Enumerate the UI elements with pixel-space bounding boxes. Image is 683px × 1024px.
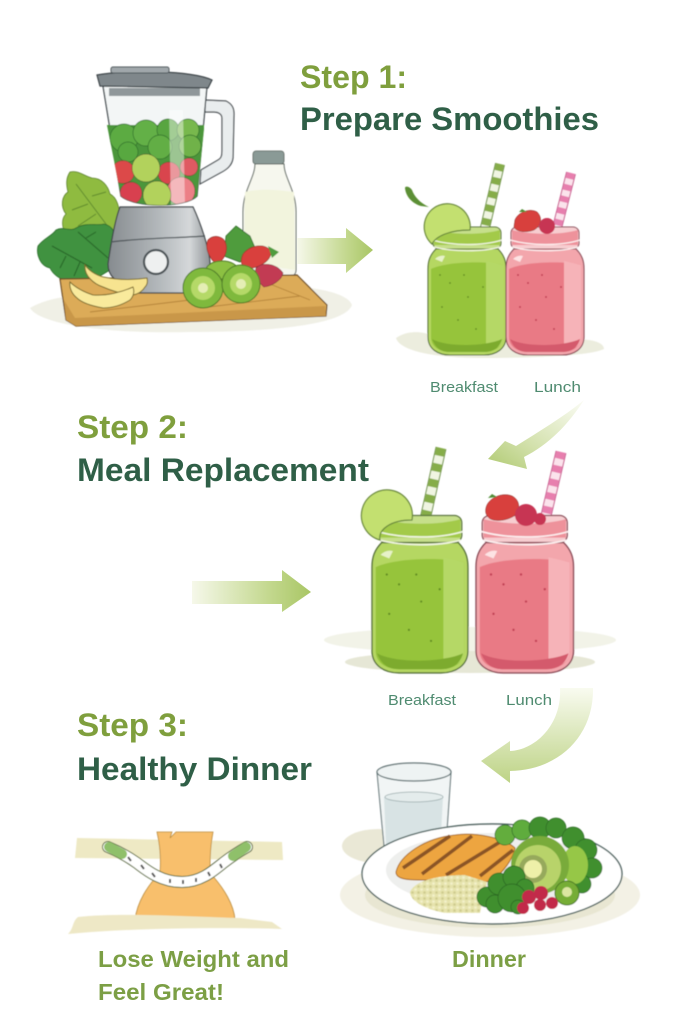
label: lunch small: Lunch	[534, 379, 581, 396]
icon: couscous	[410, 875, 487, 913]
icon: berries	[486, 494, 546, 526]
icon: green smoothie jar	[428, 227, 506, 355]
icon: blender	[97, 67, 234, 293]
icon: milk bottle	[243, 151, 296, 278]
icon: green straw	[484, 164, 500, 232]
icon: leaf stem	[405, 187, 429, 207]
label: breakfast large: Breakfast	[388, 692, 457, 709]
text: lose weight and feel great: Feel Great!	[98, 979, 224, 1005]
icon: green smoothie jar	[372, 515, 468, 673]
icon: strawberries and leaves	[207, 226, 283, 287]
icon: torso	[135, 832, 235, 920]
icon: pink straw	[556, 173, 571, 232]
text: lose weight and feel great	[98, 946, 289, 1005]
icon: measuring tape	[108, 847, 247, 884]
heading: step 3	[77, 707, 312, 787]
text: lose weight and feel great: Lose Weight and	[98, 946, 289, 972]
heading: step 1: Step 1:	[300, 59, 407, 95]
illustration: large smoothie jars	[324, 448, 616, 673]
heading: step 1	[300, 59, 599, 137]
icon: pink straw	[545, 452, 561, 520]
heading: step 2: Meal Replacement	[77, 452, 369, 488]
icon: bananas	[70, 265, 147, 308]
heading: step 3: Healthy Dinner	[77, 751, 312, 787]
arrow: blender to jars	[297, 228, 373, 273]
icon: glass of water	[377, 763, 451, 846]
arrow: toward large jars	[192, 570, 311, 612]
icon: greens	[495, 817, 602, 894]
icon: broccoli	[477, 866, 534, 914]
label: lunch large: Lunch	[506, 692, 552, 709]
heading: step 2	[77, 409, 369, 488]
icon: lime slice	[424, 204, 470, 244]
heading: step 1: Prepare Smoothies	[300, 101, 599, 137]
icon: berries	[514, 209, 555, 234]
icon: kiwi slices	[183, 261, 260, 308]
illustration: dinner plate with water glass	[340, 763, 640, 937]
icon: kiwi slice	[555, 881, 579, 905]
icon: ground strokes	[68, 915, 282, 934]
icon: lime slice	[361, 490, 412, 540]
arrow: curved down to step 2	[488, 400, 584, 469]
illustration: waist with measuring tape	[68, 832, 283, 934]
icon: cutting board	[60, 275, 327, 326]
label: breakfast small: Breakfast	[430, 379, 499, 396]
icon: grilled chicken	[396, 834, 515, 882]
icon: pink smoothie jar	[506, 227, 584, 355]
jar contents	[106, 118, 205, 206]
illustration: small smoothie jars	[396, 164, 604, 358]
icon: raspberries	[517, 886, 558, 914]
heading: step 3: Step 3:	[77, 707, 188, 743]
label: dinner: Dinner	[452, 946, 526, 972]
icon: spinach leaves	[38, 172, 120, 283]
icon: pink smoothie jar	[476, 515, 574, 673]
icon: green straw	[424, 448, 441, 524]
heading: step 2: Step 2:	[77, 409, 188, 445]
arrow: curved down to dinner	[481, 688, 593, 783]
illustration: blender with ingredients on cutting board	[30, 67, 352, 332]
icon: plate	[362, 824, 622, 924]
